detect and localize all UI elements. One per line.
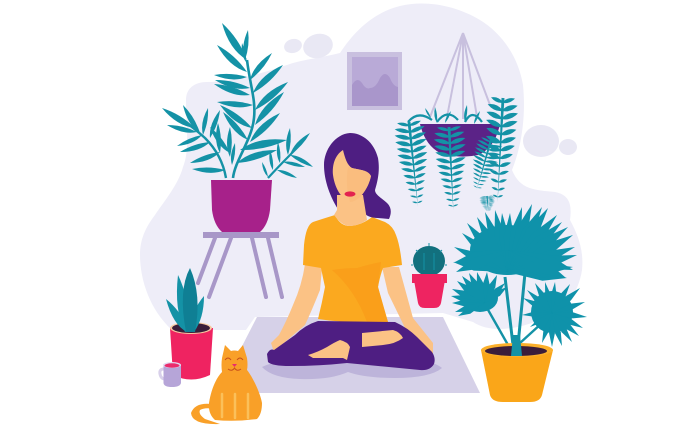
crossed legs xyxy=(267,321,435,370)
neck xyxy=(334,195,367,226)
background blob xyxy=(140,4,582,330)
hanging plant xyxy=(393,33,519,212)
woman meditating xyxy=(267,133,435,370)
shirt shading xyxy=(332,262,388,322)
orange shirt xyxy=(303,215,402,323)
main frond xyxy=(213,22,290,178)
hanging strings xyxy=(430,33,490,119)
right fan xyxy=(522,281,587,347)
trailing fronds xyxy=(393,97,519,212)
palm stems xyxy=(487,273,542,355)
wall ovals upper left xyxy=(282,31,336,61)
cactus xyxy=(411,243,447,276)
orange cat xyxy=(191,345,262,424)
right frond xyxy=(260,128,314,179)
cat stripes xyxy=(222,394,248,418)
small plant in pink pot xyxy=(166,268,213,380)
purple pot xyxy=(211,180,272,232)
lips xyxy=(344,191,356,197)
coffee mug xyxy=(160,362,181,387)
cat tail xyxy=(191,404,220,424)
pointed leaves xyxy=(166,268,204,332)
lower left fan xyxy=(450,271,509,319)
face shading xyxy=(347,167,371,202)
cat body xyxy=(209,345,262,421)
pink pot xyxy=(170,328,213,380)
stool xyxy=(198,232,282,297)
right foot xyxy=(362,330,403,347)
framed picture xyxy=(347,52,402,110)
mat shadow xyxy=(262,358,442,379)
arms xyxy=(271,264,433,354)
fan palm in orange pot xyxy=(450,202,587,402)
left frond xyxy=(160,104,236,178)
hanging pot xyxy=(420,124,500,157)
face xyxy=(333,150,371,202)
cactus in pot xyxy=(411,243,447,308)
big fan xyxy=(452,202,578,284)
yoga mat xyxy=(218,317,480,393)
cat face xyxy=(225,358,243,370)
large potted plant on stool xyxy=(160,22,314,232)
hair xyxy=(324,133,391,219)
wall ovals right xyxy=(523,125,577,157)
left foot xyxy=(308,340,350,360)
pink cactus pot xyxy=(412,274,447,308)
orange pot xyxy=(481,335,553,402)
